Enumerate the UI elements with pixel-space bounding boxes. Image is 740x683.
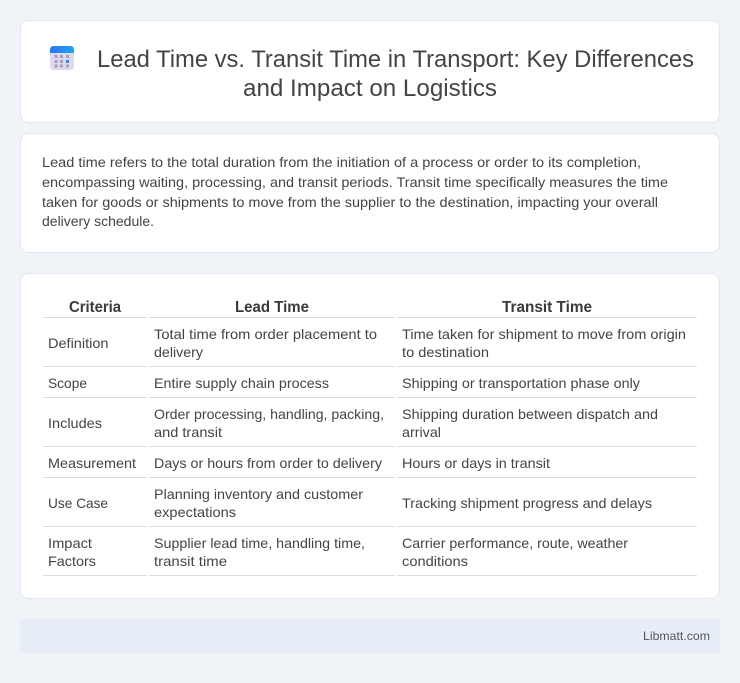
row: definition: delivery [154,344,203,360]
panel: title header [20,20,720,122]
row: use case [48,486,652,520]
title: and Impact on Logistics [243,75,497,102]
row: includes [48,406,658,440]
footer [20,619,720,653]
row: definition: Definition [48,335,108,351]
text block: definition paragraph: taken for goods or shipments to move from the supplier to the destination, impacting your overall [42,194,658,210]
text block: definition paragraph [42,154,668,229]
row: includes: arrival [402,424,441,440]
row: measurement: Days or hours from order to delivery [154,455,382,471]
row: use case: Planning inventory and customer [154,486,363,502]
row: impact factors: transit time [154,553,227,569]
text block: definition paragraph: delivery schedule. [42,213,154,229]
row: impact factors: Carrier performance, route, weather [402,535,628,551]
title: Lead Time vs. Transit Time in Transport: Key Differences [97,46,694,73]
row: impact factors: Factors [48,553,96,569]
row: definition: Total time from order placement to [154,326,377,342]
row: scope: Scope [48,375,87,391]
table header: Criteria [69,299,121,316]
row: impact factors: Impact [48,535,92,551]
row: definition [48,326,686,360]
row: scope: Shipping or transportation phase only [402,375,640,391]
row: use case: Use Case [48,495,108,511]
row: scope: Entire supply chain process [154,375,329,391]
row: scope [48,375,640,391]
row: measurement: Measurement [48,455,136,471]
row: measurement [48,455,550,471]
row: includes: Order processing, handling, packing, [154,406,384,422]
row: definition: Time taken for shipment to move from origin [402,326,686,342]
row: measurement: Hours or days in transit [402,455,550,471]
row: includes: Includes [48,415,102,431]
table header: Transit Time [502,299,592,316]
row: definition: to destination [402,344,489,360]
panel: introduction [20,134,720,252]
row: use case: Tracking shipment progress and delays [402,495,652,511]
table header: Lead Time [235,299,309,316]
row: includes: Shipping duration between dispatch and [402,406,658,422]
row: impact factors: conditions [402,553,468,569]
panel: comparison table [20,274,720,598]
icon: calendar [50,46,74,70]
footer: Libmatt.com [643,629,710,643]
table header [69,299,592,316]
text block: definition paragraph: encompassing waiting, processing, and transit periods. Transit time specifically measures the time [42,174,668,190]
row: use case: expectations [154,504,236,520]
title [97,46,694,102]
row: impact factors: Supplier lead time, handling time, [154,535,365,551]
row: impact factors [48,535,628,569]
row: includes: and transit [154,424,222,440]
text block: definition paragraph: Lead time refers to the total duration from the initiation of a process or order to its completion, [42,154,641,170]
